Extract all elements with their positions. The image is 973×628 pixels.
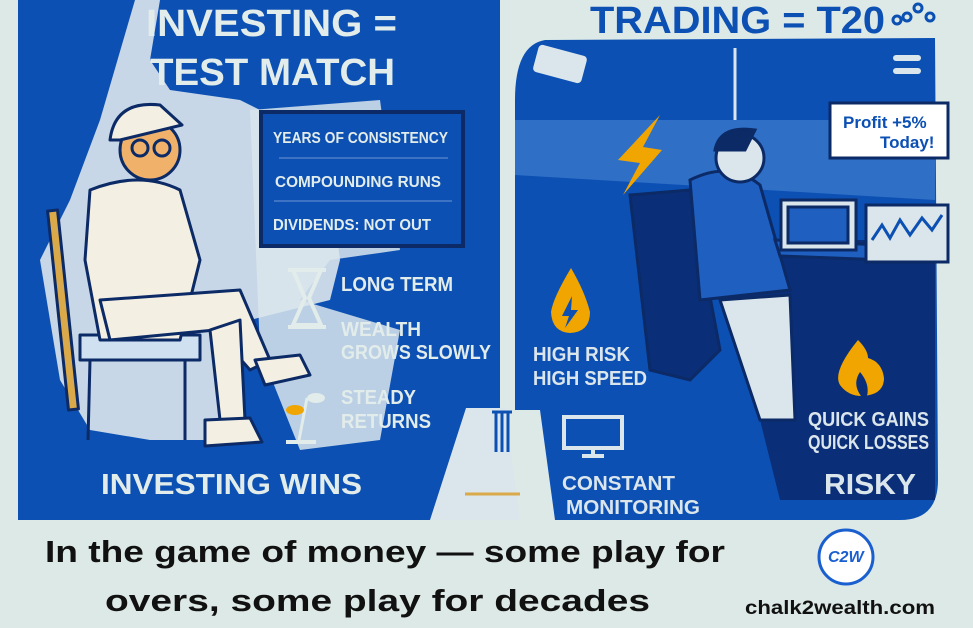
panel: trading — [515, 38, 948, 520]
logo: chalk2wealth — [745, 530, 935, 619]
title: investing: INVESTING = — [146, 3, 397, 45]
panel: trading: Today! — [880, 133, 934, 152]
caption: overs, some play for decades — [105, 583, 650, 618]
text: trading points: HIGH RISK — [533, 344, 631, 366]
icon: fire — [838, 340, 884, 396]
title: trading: TRADING = T20 — [590, 0, 885, 42]
icon: flame drop — [551, 268, 590, 333]
text: trading points: HIGH SPEED — [533, 368, 647, 390]
icon: hourglass — [288, 270, 326, 327]
title: investing — [146, 3, 397, 94]
callout box: test match facts: DIVIDENDS: NOT OUT — [273, 217, 432, 234]
callout box: test match facts — [261, 112, 463, 246]
text: investing points: STEADY — [341, 387, 417, 409]
heading: investing wins: INVESTING WINS — [101, 469, 362, 501]
text: investing points — [341, 274, 492, 433]
logo: chalk2wealth: chalk2wealth.com — [745, 598, 935, 619]
icon: lightning — [618, 115, 662, 195]
panel: trading: Profit +5% — [843, 113, 927, 132]
heading: risky: RISKY — [824, 469, 916, 501]
text: trading points: CONSTANT — [562, 473, 675, 495]
text: investing points: GROWS SLOWLY — [341, 342, 492, 364]
callout box: test match facts: COMPOUNDING RUNS — [275, 174, 441, 191]
text: trading points — [533, 344, 929, 519]
title: investing: TEST MATCH — [150, 52, 395, 94]
icon: seated man — [48, 104, 310, 446]
caption: In the game of money — some play for — [45, 534, 725, 569]
text: investing points: WEALTH — [341, 319, 421, 341]
callout box: test match facts: YEARS OF CONSISTENCY — [273, 130, 449, 147]
icon: sprout — [286, 393, 325, 442]
icon: monitor — [564, 417, 622, 456]
icon: trader at desk — [630, 103, 948, 420]
caption — [45, 534, 725, 618]
logo: chalk2wealth: C2W — [828, 549, 865, 566]
text: investing points: LONG TERM — [341, 274, 453, 296]
text: trading points: MONITORING — [566, 497, 700, 519]
text: trading points: QUICK GAINS — [808, 409, 929, 431]
panel: investing — [18, 0, 520, 520]
text: investing points: RETURNS — [341, 411, 431, 433]
text: trading points: QUICK LOSSES — [808, 432, 929, 454]
